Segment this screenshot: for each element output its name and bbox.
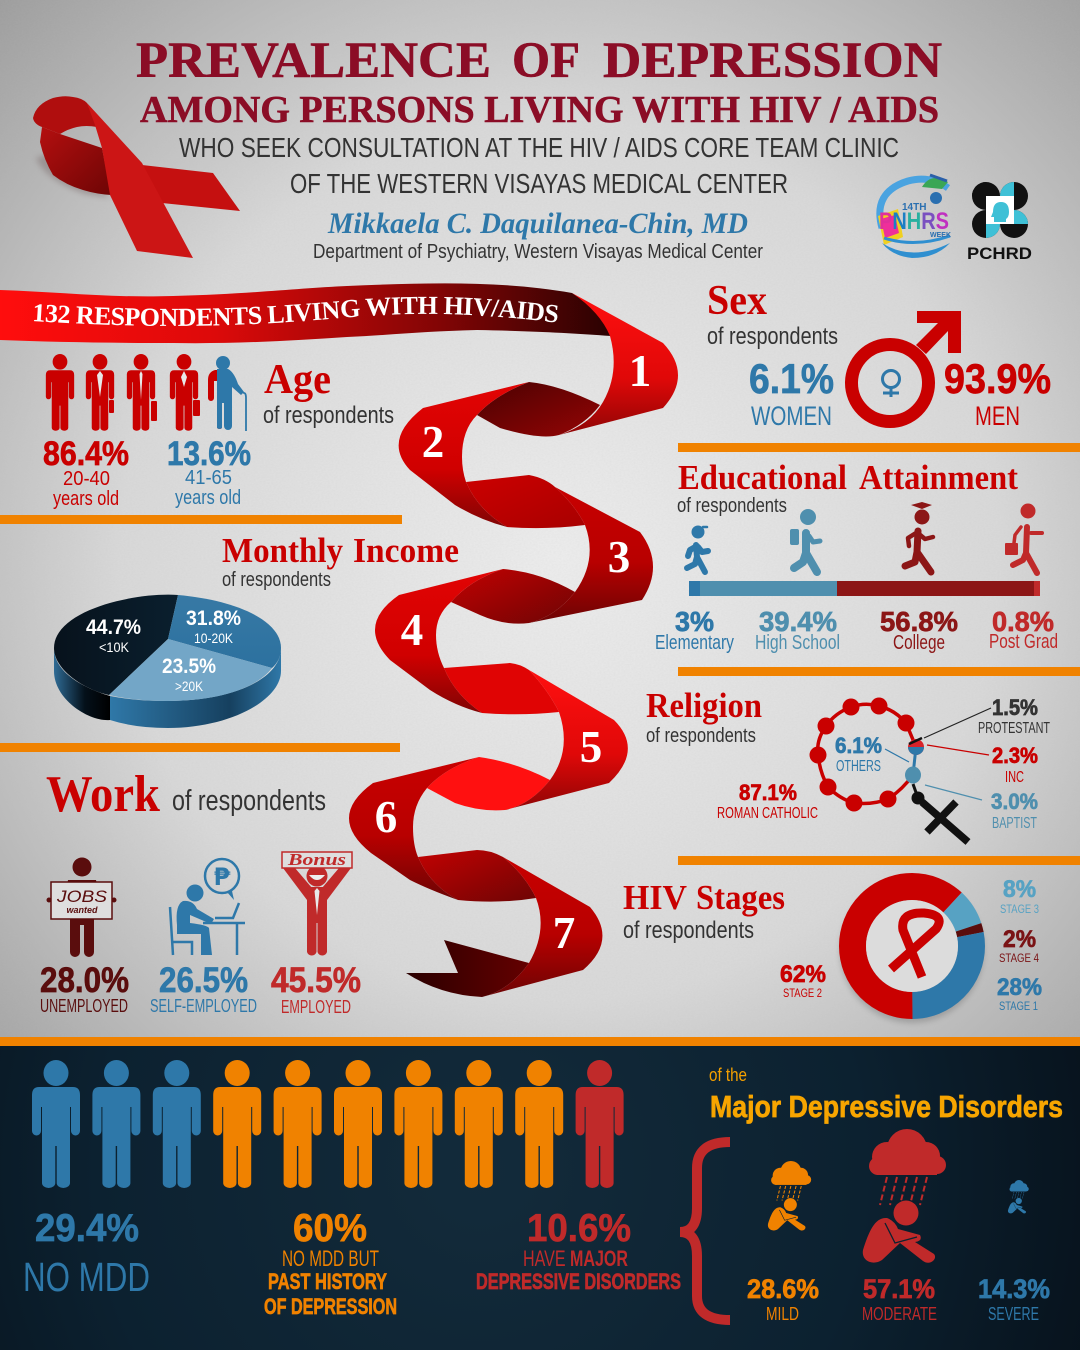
logo: PNHRS week: 14TH — [902, 202, 926, 213]
stat: roman catholic: 87.1% — [739, 780, 797, 805]
stat: past history: OF DEPRESSION — [264, 1294, 397, 1319]
stat: men: MEN — [975, 401, 1020, 431]
stat: severe: SEVERE — [988, 1304, 1039, 1324]
ribbon fold 5: 5 — [580, 722, 602, 772]
stat: 41-65: 13.6% — [167, 435, 251, 473]
logo: PCHRD — [967, 182, 1032, 263]
ribbon fold 7 and tail: 7 — [553, 908, 575, 958]
stat: no MDD: 29.4% — [35, 1207, 139, 1250]
stat: INC: INC — [1005, 769, 1024, 786]
ribbon fold 3: 3 — [608, 532, 630, 582]
icon: jobs wanted person: JOBS — [56, 887, 108, 906]
stat: 41-65 — [167, 435, 251, 509]
stat: protestant — [978, 695, 1050, 737]
stat: college: College — [893, 632, 945, 654]
icon: college runner with cap — [905, 502, 933, 572]
heading: work: Work — [46, 766, 160, 823]
stat: employed — [271, 961, 361, 1017]
stat: baptist: BAPTIST — [992, 815, 1037, 832]
stat: elementary: 3% — [675, 606, 714, 637]
stat: 20-40 — [43, 435, 129, 510]
pie chart — [54, 595, 281, 728]
ribbon fold 4: 4 — [401, 605, 423, 655]
icon: moderate — [863, 1129, 946, 1263]
stat: major depressive disorders: 10.6% — [527, 1207, 631, 1250]
stat: self-employed: 26.5% — [159, 961, 248, 1000]
stat: others: 6.1% — [835, 733, 882, 758]
pie chart: 23.5% — [162, 655, 216, 678]
icon: self-employed person — [170, 859, 245, 955]
heading: HIV stages: Stages — [696, 878, 785, 917]
ribbon fold 6: 6 — [375, 792, 397, 842]
heading: HIV stages: HIV — [623, 878, 687, 917]
stat: mild: MILD — [766, 1304, 799, 1324]
stat: stage 3: STAGE 3 — [1000, 902, 1039, 916]
pie chart: >20K — [175, 678, 204, 694]
brace — [680, 1142, 730, 1320]
stat: severe: 14.3% — [978, 1274, 1050, 1304]
subtitle: AMONG PERSONS LIVING WITH HIV / AIDS — [140, 89, 939, 131]
heading: age: Age — [264, 357, 331, 403]
icon: post grad runner with briefcase — [1005, 504, 1042, 573]
stat: post grad — [989, 606, 1058, 653]
stat: 41-65: 41-65 — [185, 467, 232, 489]
pie chart: 10-20K — [194, 630, 234, 646]
stat: college — [880, 606, 958, 654]
stat: employed: EMPLOYED — [281, 997, 351, 1017]
heading: HIV stages — [623, 878, 785, 917]
clinic line 2: OF THE WESTERN VISAYAS MEDICAL CENTER — [290, 168, 788, 199]
stat: unemployed — [40, 961, 129, 1016]
heading: educational attainment: Educational — [678, 458, 847, 497]
stat: moderate: MODERATE — [862, 1304, 937, 1324]
logo: PNHRS week — [878, 175, 951, 258]
logo: PNHRS week: PNHRS — [879, 208, 949, 235]
affiliation: Department of Psychiatry, Western Visayas Medical Center — [313, 241, 763, 263]
title — [136, 33, 942, 89]
stat: stage 1 — [997, 974, 1042, 1013]
heading: educational attainment: Attainment — [859, 458, 1018, 497]
stat: baptist — [991, 789, 1038, 832]
dark panel background — [0, 1046, 1080, 1350]
panel: work — [40, 766, 361, 1017]
section dividers — [0, 443, 1080, 1046]
stat: 20-40: years old — [53, 488, 119, 510]
stat: stage 1: STAGE 1 — [999, 999, 1038, 1013]
stat: no MDD: NO MDD — [23, 1254, 150, 1300]
icon: self-employed person: ₱ — [214, 863, 231, 891]
ribbon fold 1: 1 — [629, 346, 651, 396]
icon: rosary — [810, 698, 968, 842]
stat: moderate — [862, 1274, 937, 1324]
stat: men — [944, 355, 1051, 431]
icon: jobs wanted person: wanted — [66, 905, 98, 915]
panel: monthly income — [54, 531, 459, 728]
stat: self-employed: SELF-EMPLOYED — [150, 996, 257, 1016]
icon: employed person with bonus sign: Bonus — [287, 850, 346, 869]
stat: stage 4: STAGE 4 — [999, 951, 1039, 965]
subheading: of respondents — [623, 917, 754, 944]
icon: severe — [1008, 1180, 1029, 1213]
stat: baptist: 3.0% — [991, 789, 1038, 814]
stat: high school: High School — [755, 632, 840, 654]
stat: INC: 2.3% — [992, 743, 1038, 768]
stat: others — [835, 733, 882, 775]
icon: male symbol with female symbol — [852, 311, 961, 422]
spiral ribbon — [0, 283, 678, 997]
stat: stage 2 — [780, 961, 826, 1000]
title: DEPRESSION — [603, 33, 942, 89]
stat: stage 3: 8% — [1003, 876, 1036, 903]
stat: stage 2: STAGE 2 — [783, 986, 822, 1000]
stat: past history: 60% — [293, 1207, 367, 1250]
ribbon fold 4 — [375, 569, 559, 714]
stat: past history: PAST HISTORY — [268, 1269, 387, 1294]
donut chart — [840, 879, 984, 1023]
stat: mild: 28.6% — [747, 1274, 819, 1304]
stat: women — [749, 355, 834, 431]
stacked bar — [689, 581, 1040, 596]
heading: monthly income — [222, 531, 459, 570]
stat: roman catholic — [717, 780, 818, 822]
stat: high school: 39.4% — [759, 606, 837, 637]
stat: unemployed: UNEMPLOYED — [40, 996, 128, 1016]
panel: religion — [646, 686, 1050, 842]
pie chart: <10K — [99, 639, 130, 655]
stat: stage 2: 62% — [780, 961, 826, 988]
stat: stage 3 — [1000, 876, 1039, 916]
heading: monthly income: Monthly — [222, 531, 343, 570]
panel: HIV stages — [623, 876, 1042, 1023]
leader lines — [885, 708, 991, 800]
stat: past history — [264, 1207, 397, 1319]
stat: major depressive disorders: HAVE MAJOR — [523, 1246, 628, 1271]
heading: sex: Sex — [707, 278, 767, 324]
stat: employed: 45.5% — [271, 961, 361, 1000]
panel: age — [43, 354, 394, 510]
stat: college: 56.8% — [880, 606, 958, 637]
pie chart: 44.7% — [86, 616, 141, 639]
ribbon fold 2: 2 — [422, 417, 444, 467]
author: Mikkaela C. Daquilanea-Chin, MD — [327, 207, 748, 240]
panel: educational attainment — [655, 458, 1058, 654]
stat: stage 4 — [999, 926, 1039, 965]
stat: severe — [978, 1274, 1050, 1324]
heading: religion: Religion — [646, 686, 762, 725]
clinic line 1: WHO SEEK CONSULTATION AT THE HIV / AIDS CORE TEAM CLINIC — [179, 132, 899, 163]
heading: of the: of the — [709, 1065, 747, 1085]
stat: women: WOMEN — [751, 401, 832, 431]
subheading: of respondents — [646, 725, 756, 747]
stat: INC — [992, 743, 1038, 786]
subheading: of respondents — [172, 785, 326, 817]
panel: depression outcomes — [0, 1046, 1080, 1350]
stat: self-employed — [150, 961, 257, 1016]
stat: elementary: Elementary — [655, 632, 734, 654]
icon: employed person with bonus sign — [282, 850, 352, 955]
stat: past history: NO MDD BUT — [282, 1246, 379, 1271]
ribbon fold 3 — [451, 487, 653, 624]
stat: major depressive disorders — [476, 1207, 681, 1294]
subheading: of respondents — [707, 323, 838, 350]
stat: women: 6.1% — [749, 355, 834, 402]
icon: high school runner with backpack — [790, 509, 820, 572]
header — [136, 33, 942, 263]
icon: five people — [46, 354, 246, 431]
stat: roman catholic: ROMAN CATHOLIC — [717, 805, 818, 822]
stat: others: OTHERS — [836, 758, 881, 775]
stat: moderate: 57.1% — [863, 1274, 935, 1304]
stat: major depressive disorders: DEPRESSIVE DISORDERS — [476, 1269, 681, 1294]
heading: educational attainment — [678, 458, 1018, 497]
subheading: of respondents — [263, 402, 394, 429]
stat: elementary — [655, 606, 734, 654]
ribbon fold 6 — [349, 757, 536, 902]
banner — [0, 283, 610, 344]
stat: stage 1: 28% — [997, 974, 1042, 1001]
panel: sex — [707, 278, 1051, 431]
icon: jobs wanted person — [46, 858, 116, 957]
stat: no MDD — [23, 1207, 150, 1300]
stat: post grad: Post Grad — [989, 631, 1058, 653]
heading: monthly income: Income — [353, 531, 459, 570]
stat: 41-65: years old — [175, 487, 241, 509]
banner: 132 RESPONDENTS LIVING WITH HIV/AIDS — [34, 296, 558, 326]
stat: men: 93.9% — [944, 355, 1051, 402]
subheading: of respondents — [222, 569, 331, 591]
stat: stage 4: 2% — [1003, 926, 1036, 953]
stat: unemployed: 28.0% — [40, 961, 129, 1000]
title: OF — [512, 33, 580, 89]
ribbon fold 7 and tail — [406, 857, 602, 997]
stat: 20-40: 86.4% — [43, 435, 129, 473]
logo: PNHRS week: WEEK — [930, 232, 951, 239]
title: PREVALENCE — [136, 33, 491, 89]
logo: PCHRD: PCHRD — [967, 244, 1032, 263]
pie chart: 31.8% — [186, 607, 241, 630]
ribbon fold 5 — [427, 670, 628, 810]
icon row: ten people — [32, 1060, 624, 1188]
ribbon fold 2 — [399, 382, 585, 528]
stat: 20-40: 20-40 — [63, 468, 110, 490]
stat: high school — [755, 606, 840, 654]
stat: post grad: 0.8% — [992, 606, 1054, 637]
icon: elementary runner — [687, 526, 708, 572]
stat: mild — [747, 1274, 819, 1324]
stat: protestant: 1.5% — [992, 695, 1038, 720]
icon: mild — [768, 1161, 811, 1231]
ribbon fold 1 — [477, 293, 678, 436]
subheading: of respondents — [677, 495, 787, 517]
icon: red awareness ribbon — [33, 96, 240, 258]
